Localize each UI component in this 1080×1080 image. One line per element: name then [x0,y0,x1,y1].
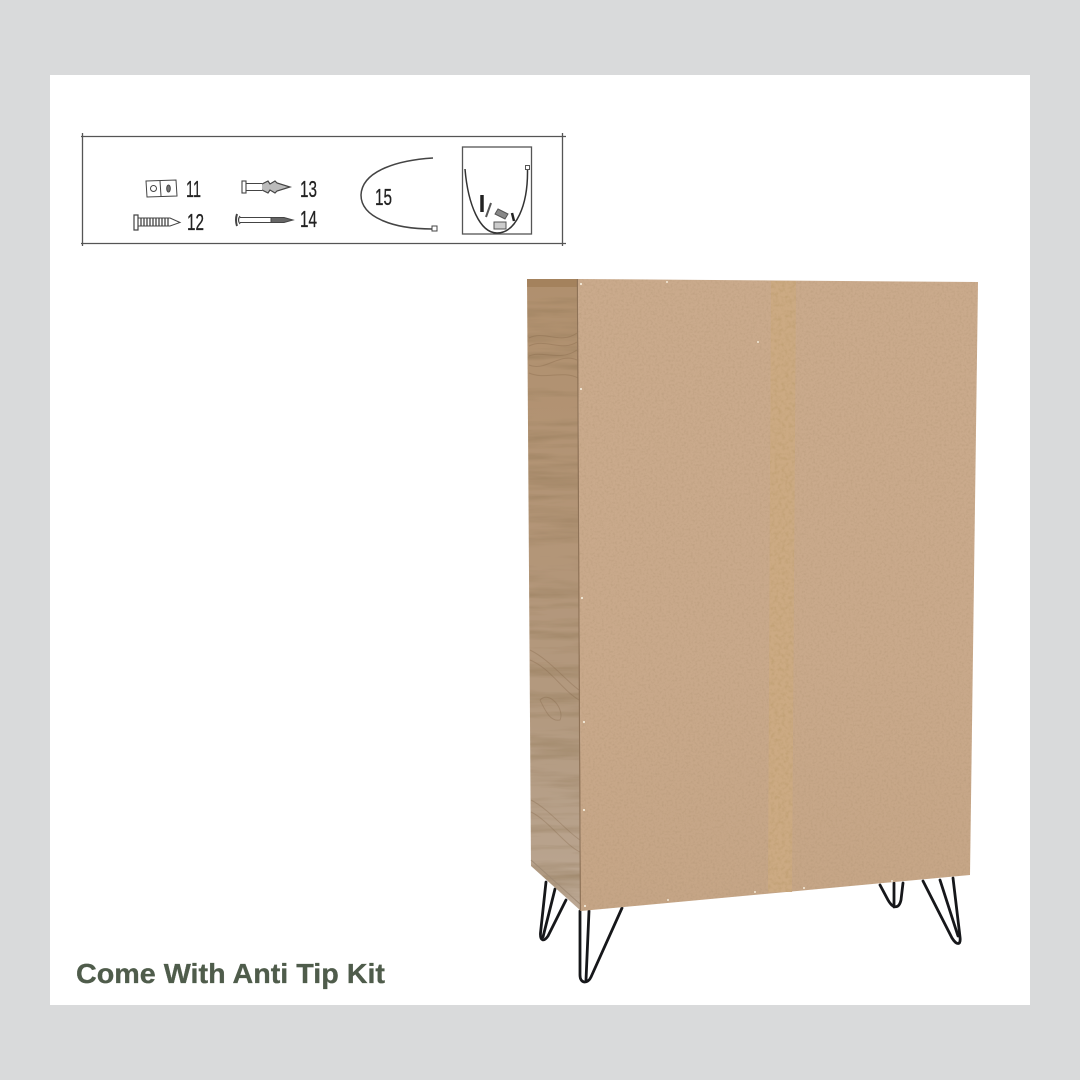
corner edge [578,279,580,911]
label: 14: 14 [300,206,317,232]
diagram frame [81,133,566,246]
cabinet legs [540,878,960,982]
central join strip [768,281,796,892]
icon: part 11 bracket [146,180,177,197]
icon: part 15 anchor strap [361,158,437,231]
label: 15: 15 [375,184,392,210]
cabinet [527,279,978,911]
icon: part 14 screw [236,214,293,226]
nail dots [580,281,893,907]
back left leg inner wire [543,889,555,937]
icon: hardware bag [462,147,532,234]
side bottom trim line [531,860,580,904]
wood knots and grain [529,333,580,852]
side top shading band [527,279,577,287]
label: 13: 13 [300,176,317,202]
label: 11: 11 [186,176,201,202]
caption: Come With Anti Tip Kit [76,958,385,989]
label: 12: 12 [187,209,204,235]
front left leg [580,908,622,982]
panel: anti tip kit parts diagram [81,133,566,246]
white panel [50,75,1030,1005]
cabinet side panel with wood grain [527,279,581,911]
back right leg [880,883,903,907]
right leg [923,878,960,944]
icon: part 12 screw [134,215,180,230]
back left leg [540,882,566,940]
cabinet back board [578,279,978,911]
icon: part 13 wall anchor [242,181,290,193]
